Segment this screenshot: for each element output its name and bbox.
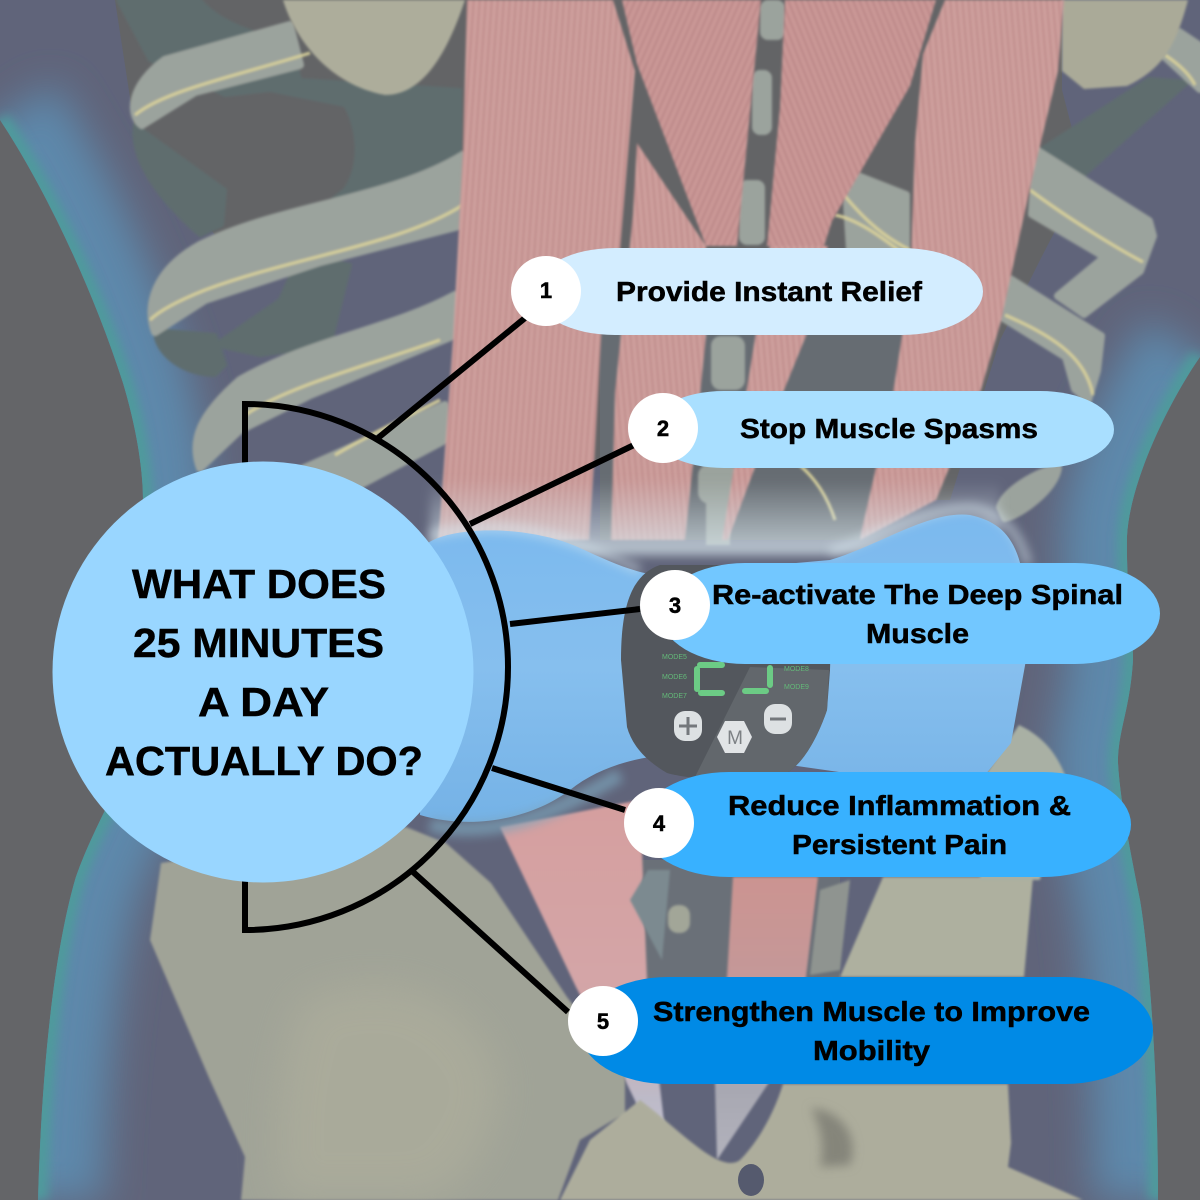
mode labels [662,654,809,700]
mode labels: MODE9 [784,684,809,691]
item 2: Stop Muscle Spasms [628,391,1114,468]
plus button [674,711,702,741]
item 4: Reduce Inflammation & Persistent Pain: Reduce Inflammation & [728,790,1071,821]
minus button [764,704,792,734]
item 3: Re-activate The Deep Spinal Muscle: Re-activate The Deep Spinal [712,579,1123,610]
connector lines [378,318,640,1012]
ribs [118,0,1200,520]
M button [717,721,752,753]
item 3: Re-activate The Deep Spinal Muscle [640,563,1160,664]
arc bracket around the title circle [245,404,508,930]
upper bones [283,0,1188,545]
device controller body [621,565,830,780]
muscles [438,0,1064,1173]
item 5: Strengthen Muscle to Improve Mobility: Strengthen Muscle to Improve [653,996,1090,1027]
lower muscles [500,800,670,1173]
item 3: Re-activate The Deep Spinal Muscle: 3 [669,593,681,618]
item 3: Re-activate The Deep Spinal Muscle: Muscle [866,618,969,649]
title text: 25 MINUTES [133,620,384,666]
item 5: Strengthen Muscle to Improve Mobility: 5 [597,1009,609,1034]
device: blue wings behind content [420,508,1028,829]
back rib shadows [118,0,1188,375]
item 5: Strengthen Muscle to Improve Mobility [568,977,1153,1084]
item 1: Provide Instant Relief: Provide Instant Relief [616,276,923,307]
mode labels: MODE7 [662,693,687,700]
mode labels: MODE6 [662,674,687,681]
title circle [52,462,474,882]
item 4: Reduce Inflammation & Persistent Pain: Persistent Pain [792,829,1007,860]
item 2: Stop Muscle Spasms: 2 [657,416,669,441]
title text: ACTUALLY DO? [105,738,423,784]
mode labels: MODE8 [784,666,809,673]
item 1: Provide Instant Relief: 1 [540,278,552,303]
title text [105,561,423,784]
item 4: Reduce Inflammation & Persistent Pain: 4 [653,811,666,836]
torso cavity [115,0,1084,500]
pelvis bones [150,725,1083,1200]
nerves [135,53,1195,520]
item 5: Strengthen Muscle to Improve Mobility: Mobility [813,1035,930,1066]
item 4: Reduce Inflammation & Persistent Pain [624,772,1131,877]
item 2: Stop Muscle Spasms: Stop Muscle Spasms [740,413,1038,444]
title text: WHAT DOES [132,561,386,607]
rib bands [134,25,1200,518]
M button: M [727,728,743,749]
mode labels: MODE5 [662,654,687,661]
title text: A DAY [198,679,329,725]
item 1: Provide Instant Relief [511,248,983,335]
timer display [697,665,770,693]
